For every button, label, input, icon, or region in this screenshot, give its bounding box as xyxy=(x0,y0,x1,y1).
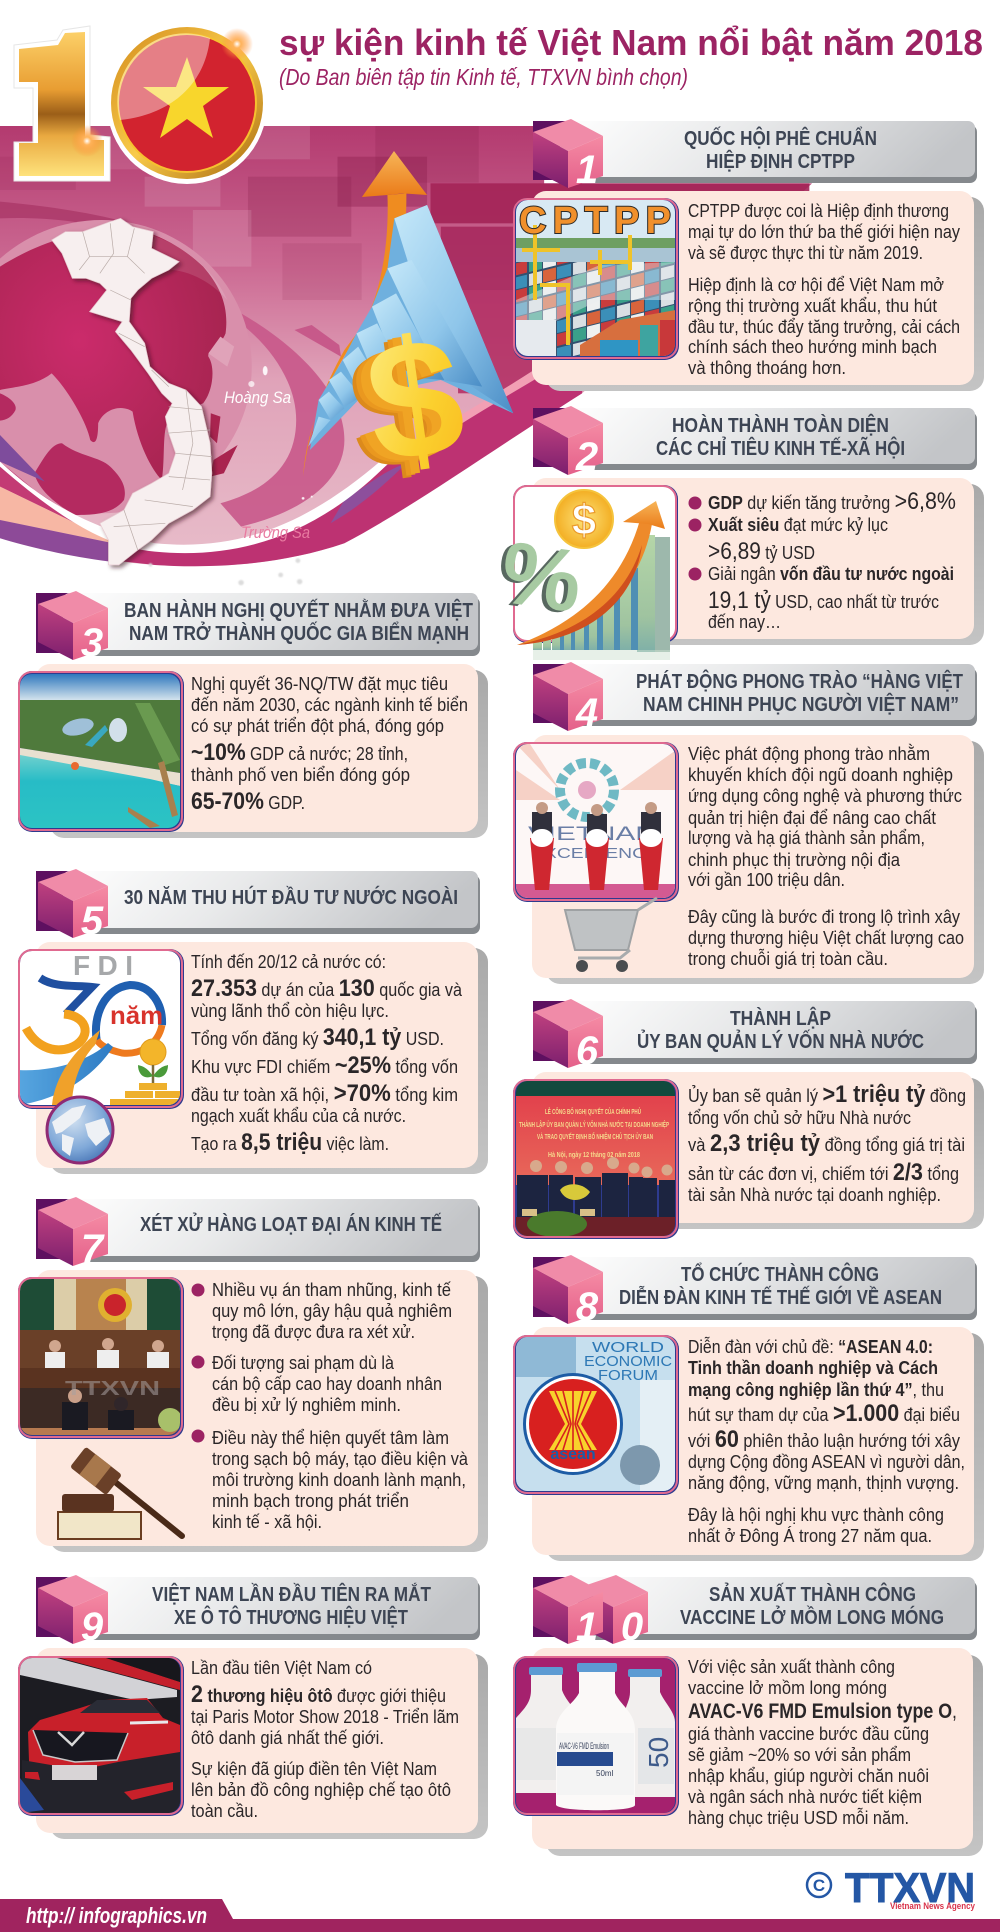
chart illustration: percent and rising arrow xyxy=(491,485,678,660)
text 10: sẽ giảm ~20% so với sản phẩm xyxy=(688,1745,911,1765)
text 2: đến nay… xyxy=(708,612,781,632)
text 3 xyxy=(191,674,468,815)
text 10: giá thành vaccine bước đầu cũng xyxy=(688,1724,929,1744)
text 7: Điều này thể hiện quyết tâm làm xyxy=(212,1428,449,1448)
text 10: Với việc sản xuất thành công xyxy=(688,1657,895,1677)
text 2 xyxy=(688,488,956,632)
photo: ASEAN emblem and WEF logo xyxy=(513,1335,679,1495)
header 4 xyxy=(533,662,977,735)
text 1: CPTPP được coi là Hiệp định thương xyxy=(688,201,949,221)
title: sự kiện kinh tế Việt Nam nổi bật năm 2018 xyxy=(279,22,983,63)
photo: vaccine bottles: 50 xyxy=(643,1737,674,1768)
header 8: DIỄN ĐÀN KINH TẾ THẾ GIỚI VỀ ASEAN xyxy=(619,1285,942,1309)
text 4: dựng thương hiệu Việt chất lượng cao xyxy=(688,928,964,948)
text 4: trong chuỗi giá trị toàn cầu. xyxy=(688,948,888,969)
text 5: Khu vực FDI chiếm ~25% tổng vốn xyxy=(191,1052,458,1079)
text 9: lên bản đồ công nghiệp chế tạo ôtô xyxy=(191,1780,451,1800)
header 3: BAN HÀNH NGHỊ QUYẾT NHẰM ĐƯA VIỆT xyxy=(124,598,473,622)
photo: committee ceremony: Hà Nội, ngày 12 tháng 02 năm 2018 xyxy=(548,1150,640,1159)
text 3: thành phố ven biển đóng góp xyxy=(191,765,410,785)
text 9: Lần đầu tiên Việt Nam có xyxy=(191,1658,372,1678)
text 5: 27.353 dự án của 130 quốc gia và xyxy=(191,975,463,1002)
text 9 xyxy=(191,1658,459,1821)
bars xyxy=(533,535,670,660)
panel 5 xyxy=(36,942,488,1174)
photo: coastal resort xyxy=(18,671,184,832)
text 3: có sự phát triển đột phá, đóng góp xyxy=(191,716,444,736)
text 4: ứng dụng công nghệ và phương thức xyxy=(688,786,962,806)
panel 10 xyxy=(532,1648,983,1856)
text 6: tài sản Nhà nước tại doanh nghiệp. xyxy=(688,1185,941,1205)
icon: dollar sign: $ xyxy=(341,306,460,505)
photo: committee ceremony: LỄ CÔNG BỐ NGHỊ QUYẾT CỦA CHÍNH PHỦ xyxy=(545,1106,641,1116)
header 1: HIỆP ĐỊNH CPTPP xyxy=(706,149,855,173)
photo: ASEAN emblem and WEF logo: asean xyxy=(550,1446,596,1463)
panel 1 xyxy=(532,191,984,391)
logo: FDI 30 years xyxy=(18,949,184,1163)
header 2 xyxy=(533,406,977,479)
photo: committee ceremony xyxy=(513,1079,679,1239)
header 1: QUỐC HỘI PHÊ CHUẨN xyxy=(684,126,877,150)
globe xyxy=(0,220,252,515)
text 1: chính sách theo hướng minh bạch xyxy=(688,337,937,357)
text 10: và ngân sách nhà nước tiết kiệm xyxy=(688,1787,922,1807)
photo: campaign launch stage: EXCELLENCE xyxy=(531,845,659,862)
lower swoosh bands xyxy=(110,347,585,566)
section 9: first Vietnamese car brand xyxy=(18,1575,488,1839)
header 1 xyxy=(533,119,977,192)
icon: dollar sign: $ xyxy=(346,304,465,503)
panel 7 xyxy=(36,1270,488,1552)
text 10: hàng chục triệu USD mỗi năm. xyxy=(688,1807,909,1828)
header 10: 1 xyxy=(576,1605,598,1649)
text 2: GDP dự kiến tăng trưởng >6,8% xyxy=(708,488,956,515)
header 8: 8 xyxy=(576,1285,599,1329)
text 9: Sự kiện đã giúp điền tên Việt Nam xyxy=(191,1759,437,1779)
icon: gold coin xyxy=(555,490,613,548)
text 7: trọng đã được đưa ra xét xử. xyxy=(212,1322,415,1342)
text 9: tại Paris Motor Show 2018 - Triển lãm xyxy=(191,1707,459,1727)
text 8: hút sự tham dự của >1.000 đại biểu xyxy=(688,1400,960,1427)
text 5: Tính đến 20/12 cả nước có: xyxy=(191,952,386,972)
panel 4 xyxy=(532,735,984,984)
text 8: Đây là hội nghị khu vực thành công xyxy=(688,1505,944,1525)
text 5: đầu tư toàn xã hội, >70% tổng kim xyxy=(191,1080,458,1107)
text 8: năng động, vững mạnh, thịnh vượng. xyxy=(688,1473,959,1493)
header 5: 5 xyxy=(81,899,104,943)
header 8 xyxy=(533,1255,977,1329)
text 1: và thông thoáng hơn. xyxy=(688,358,846,378)
header 4: 4 xyxy=(575,691,598,735)
icon: gold coin: $ xyxy=(572,496,596,545)
text 1: mại tự do lớn thứ ba thế giới hiện nay xyxy=(688,222,960,242)
panel 6 xyxy=(532,1072,984,1229)
text 1: rộng thị trường xuất khẩu, thu hút xyxy=(688,296,937,316)
text 5 xyxy=(191,952,463,1156)
text 1: và sẽ được thực thi từ năm 2019. xyxy=(688,243,923,263)
header 9 xyxy=(36,1575,480,1649)
header 7: XÉT XỬ HÀNG LOẠT ĐẠI ÁN KINH TẾ xyxy=(140,1212,442,1236)
panel 2 xyxy=(532,478,984,645)
icon: dollar sign: $ xyxy=(338,308,456,507)
text 3: đến năm 2030, các ngành kinh tế biển xyxy=(191,695,468,715)
text 5: vùng lãnh thổ còn hiệu lực. xyxy=(191,1001,389,1021)
text 3: ~10% GDP cả nước; 28 tỉnh, xyxy=(191,739,408,766)
photo: CPTPP container port xyxy=(513,198,679,360)
text 8 xyxy=(688,1336,965,1546)
icon: shopping cart xyxy=(565,898,657,972)
header 2: CÁC CHỈ TIÊU KINH TẾ-XÃ HỘI xyxy=(656,436,905,460)
text 5: Tạo ra 8,5 triệu việc làm. xyxy=(191,1129,389,1156)
logo: TTXVN Vietnam News Agency: Vietnam News Agency xyxy=(890,1901,976,1912)
text 6: sản từ các đơn vị, chiếm tới 2/3 tổng xyxy=(688,1159,959,1186)
header 9: VIỆT NAM LẦN ĐẦU TIÊN RA MẮT xyxy=(152,1582,431,1606)
section 2: socio-economic targets xyxy=(491,406,984,660)
photo: committee ceremony: VÀ TRAO QUYẾT ĐỊNH BỔ NHIỆM CHỦ TỊCH ỦY BAN xyxy=(537,1131,653,1141)
photo: courtroom: TTXVN xyxy=(65,1378,160,1400)
text 7: cán bộ cấp cao hay doanh nhân xyxy=(212,1374,442,1394)
text 8: mạng công nghiệp lần thứ 4”, thu xyxy=(688,1380,944,1400)
numeral 1 xyxy=(14,26,110,181)
photo: ASEAN emblem and WEF logo: FORUM xyxy=(598,1367,658,1384)
header 6: ỦY BAN QUẢN LÝ VỐN NHÀ NƯỚC xyxy=(637,1029,924,1053)
header 10: VACCINE LỞ MỒM LONG MÓNG xyxy=(680,1605,944,1629)
text 5: ngạch xuất khẩu của cả nước. xyxy=(191,1106,406,1126)
header 4: NAM CHINH PHỤC NGƯỜI VIỆT NAM” xyxy=(643,692,959,716)
footer band with URL xyxy=(0,1899,1000,1932)
panel 9 xyxy=(36,1648,488,1839)
footer band with URL: http:// infographics.vn xyxy=(26,1903,207,1928)
header 2: HOÀN THÀNH TOÀN DIỆN xyxy=(672,413,889,437)
text 7: minh bạch trong phát triển xyxy=(212,1491,409,1511)
logo: FDI 30 years: FDI xyxy=(73,950,133,981)
section 5: 30 years of FDI xyxy=(18,869,488,1174)
text 7: môi trường kinh doanh lành mạnh, xyxy=(212,1470,466,1490)
header 8: TỔ CHỨC THÀNH CÔNG xyxy=(681,1262,879,1286)
text 8: Diễn đàn với chủ đề: “ASEAN 4.0: xyxy=(688,1336,933,1357)
text 7 xyxy=(192,1280,469,1532)
hero illustration: globe, Vietnam map and growth arrow xyxy=(0,126,812,585)
text 1: đầu tư, thúc đẩy tăng trưởng, cải cách xyxy=(688,317,960,337)
photo: vaccine bottles: 50ml xyxy=(596,1769,614,1778)
text 4: lượng và hạ giá thành sản phẩm, xyxy=(688,828,925,848)
text 7: trong sạch bộ máy, tạo điều kiện và xyxy=(212,1449,469,1469)
header 3 xyxy=(36,591,480,665)
text 2: 19,1 tỷ USD, cao nhất từ trước xyxy=(708,587,939,614)
text 3: 65-70% GDP. xyxy=(191,788,305,815)
header 5 xyxy=(36,869,480,943)
text 10 xyxy=(688,1657,957,1828)
header 1: 1 xyxy=(576,148,598,192)
text 9: toàn cầu. xyxy=(191,1801,258,1821)
photo: campaign launch stage xyxy=(513,742,679,902)
text 7: Đối tượng sai phạm dù là xyxy=(212,1353,395,1373)
text 8: Tinh thần doanh nghiệp và Cách xyxy=(688,1358,938,1378)
text 4 xyxy=(688,743,964,969)
text 4: Việc phát động phong trào nhằm xyxy=(688,743,930,764)
section 10: FMD vaccine xyxy=(513,1575,983,1856)
section 6: state capital committee xyxy=(513,999,984,1239)
text 2: >6,89 tỷ USD xyxy=(708,538,815,565)
photo: CPTPP container port: CPTPP xyxy=(519,200,671,242)
header 9: 9 xyxy=(81,1605,104,1649)
text 6 xyxy=(688,1081,966,1205)
text 1: Hiệp định là cơ hội để Việt Nam mở xyxy=(688,275,944,295)
panel 3 xyxy=(36,664,488,838)
photo: vaccine bottles xyxy=(513,1656,679,1816)
text 9: 2 thương hiệu ôtô được giới thiệu xyxy=(191,1681,446,1708)
header 2: 2 xyxy=(575,435,598,479)
section 8: World Economic Forum on ASEAN xyxy=(513,1255,984,1561)
label: Trường Sa: Trường Sa xyxy=(241,523,310,542)
text 8: với 60 phiên thảo luận hướng tới xây xyxy=(688,1426,960,1453)
text 2: Xuất siêu đạt mức kỷ lục xyxy=(708,515,888,535)
header 3: NAM TRỞ THÀNH QUỐC GIA BIỂN MẠNH xyxy=(129,621,469,645)
header 6: THÀNH LẬP xyxy=(730,1006,831,1030)
icon: dollar sign: $ xyxy=(356,300,474,499)
text 7: đều bị xử lý nghiêm minh. xyxy=(212,1395,401,1415)
panel 8 xyxy=(532,1327,984,1561)
photo: campaign launch stage: VIETNAM xyxy=(528,824,660,845)
text 6: Ủy ban sẽ quản lý >1 triệu tỷ đồng xyxy=(688,1081,966,1108)
text 1 xyxy=(688,201,960,378)
text 10: AVAC-V6 FMD Emulsion type O, xyxy=(688,1700,957,1723)
text 3: Nghị quyết 36-NQ/TW đặt mục tiêu xyxy=(191,674,448,694)
text 8: nhất ở Đông Á trong 27 năm qua. xyxy=(688,1526,932,1546)
photo: ASEAN emblem and WEF logo: WORLD xyxy=(592,1339,664,1356)
icon: percent sign: % xyxy=(495,522,588,631)
section 7: economic trials xyxy=(18,1197,488,1552)
text 9: ôtô danh giá nhất thế giới. xyxy=(191,1728,384,1748)
section 1: CPTPP xyxy=(513,119,984,391)
header 9: XE Ô TÔ THƯƠNG HIỆU VIỆT xyxy=(174,1605,408,1629)
text 6: tổng vốn chủ sở hữu Nhà nước xyxy=(688,1108,911,1128)
logo: TTXVN Vietnam News Agency: C xyxy=(813,1876,825,1895)
text 7: quy mô lớn, gây hậu quả nghiêm xyxy=(212,1301,452,1321)
section 4: buy Vietnamese campaign xyxy=(513,662,984,984)
big number 10 with flag medal xyxy=(14,24,267,184)
text 7: kinh tế - xã hội. xyxy=(212,1512,322,1532)
header 6: 6 xyxy=(576,1029,599,1073)
header 10: SẢN XUẤT THÀNH CÔNG xyxy=(709,1582,916,1606)
photo: red car xyxy=(18,1656,184,1816)
text 6: và 2,3 triệu tỷ đồng tổng giá trị tài xyxy=(688,1130,965,1157)
text 4: chinh phục thị trường nội địa xyxy=(688,850,901,870)
logo: FDI 30 years: năm xyxy=(110,1002,163,1030)
header 5: 30 NĂM THU HÚT ĐẦU TƯ NƯỚC NGOÀI xyxy=(124,885,458,909)
photo: ASEAN emblem and WEF logo: ECONOMIC xyxy=(584,1353,672,1370)
swoosh background xyxy=(0,126,812,566)
icon: percent sign: % xyxy=(491,524,584,633)
header 7 xyxy=(36,1197,480,1271)
flag medal xyxy=(107,24,267,184)
header 3: 3 xyxy=(81,621,103,665)
header 10: 0 xyxy=(621,1605,643,1649)
icon: judge gavel xyxy=(58,1447,182,1539)
section 3: maritime resolution xyxy=(18,591,488,838)
label: Hoàng Sa: Hoàng Sa xyxy=(224,388,291,407)
header 10 xyxy=(533,1575,977,1649)
text 7: Nhiều vụ án tham nhũng, kinh tế xyxy=(212,1280,451,1300)
text 4: quản trị hiện đại để nâng cao chất xyxy=(688,808,936,828)
text 10: nhập khẩu, giúp người chăn nuôi xyxy=(688,1766,929,1786)
text 4: Đây cũng là bước đi trong lộ trình xây xyxy=(688,907,960,927)
header 6 xyxy=(533,999,977,1073)
text 2: Giải ngân vốn đầu tư nước ngoài xyxy=(708,564,954,584)
arrow xyxy=(517,501,665,645)
map of Vietnam xyxy=(52,218,313,585)
icon: globe xyxy=(47,1097,113,1163)
text 5: Tổng vốn đăng ký 340,1 tỷ USD. xyxy=(191,1024,444,1051)
text 10: vaccine lở mồm long móng xyxy=(688,1678,887,1698)
text 4: với gần 100 triệu dân. xyxy=(688,870,845,890)
photo: courtroom xyxy=(18,1277,184,1439)
text 4: khuyến khích đội ngũ doanh nghiệp xyxy=(688,765,953,785)
photo: committee ceremony: THÀNH LẬP ỦY BAN QUẢN LÝ VỐN NHÀ NƯỚC TẠI DOANH NGHIỆP xyxy=(519,1119,669,1129)
subtitle: (Do Ban biên tập tin Kinh tế, TTXVN bình chọn) xyxy=(279,64,688,90)
growth arrow and blue bars xyxy=(303,151,513,477)
header 7: 7 xyxy=(81,1227,105,1271)
photo: vaccine bottles: AVAC-V6 FMD Emulsion xyxy=(559,1741,609,1751)
text 8: dựng Cộng đồng ASEAN vì người dân, xyxy=(688,1452,965,1472)
logo: TTXVN Vietnam News Agency: TTXVN xyxy=(845,1864,975,1911)
